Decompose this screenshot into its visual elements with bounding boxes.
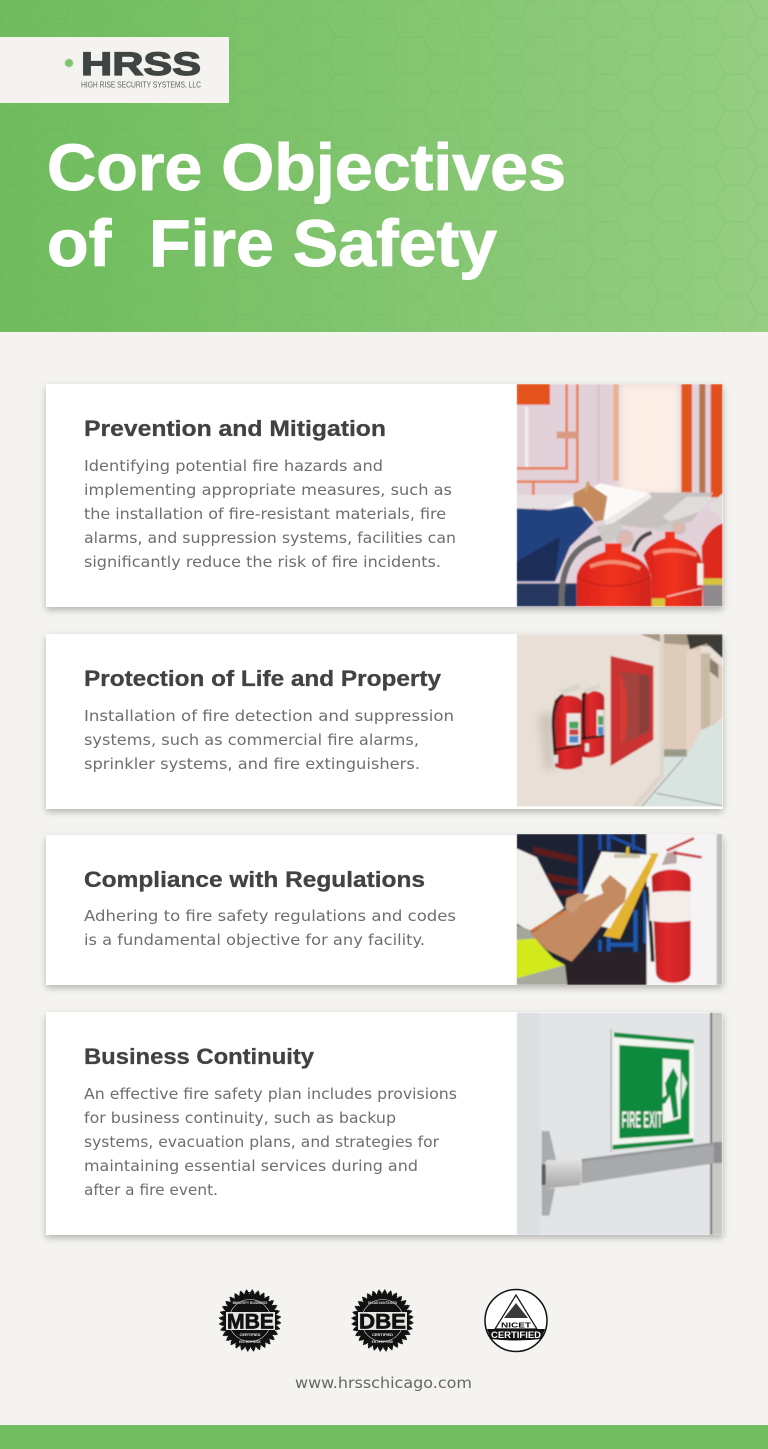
heading: prevention: Prevention and Mitigation bbox=[84, 416, 386, 441]
text block: business continuity: for business continuity, such as backup bbox=[84, 1109, 396, 1127]
text block: protection: Installation of fire detection and suppression bbox=[84, 707, 454, 725]
text block: business continuity: An effective fire safety plan includes provisions bbox=[84, 1085, 457, 1103]
badge: MBE certified: CERTIFIED bbox=[239, 1332, 261, 1337]
panel: business continuity bbox=[46, 1012, 723, 1235]
logo: HRSS bbox=[0, 37, 229, 103]
heading: compliance: Compliance with Regulations bbox=[84, 867, 425, 892]
photo: technician inspecting extinguishers bbox=[517, 384, 723, 607]
badge: DBE certified: DBE bbox=[359, 1310, 406, 1334]
text block: prevention: significantly reduce the risk of fire incidents. bbox=[84, 553, 441, 571]
text block: prevention bbox=[84, 457, 456, 571]
panel: prevention and mitigation bbox=[46, 384, 723, 607]
panel: protection of life and property bbox=[46, 634, 723, 809]
logo: HRSS: HRSS bbox=[81, 46, 201, 82]
text block: business continuity bbox=[84, 1085, 457, 1199]
text block: business continuity: maintaining essential services during and bbox=[84, 1157, 418, 1175]
text block: protection: sprinkler systems, and fire extinguishers. bbox=[84, 755, 420, 773]
title: Core Objectives bbox=[47, 130, 566, 204]
text block: prevention: the installation of fire-resistant materials, fire bbox=[84, 505, 446, 523]
photo: fire exit door and push bar: FIRE EXIT bbox=[622, 1106, 662, 1132]
badge: MBE certified: ENTERPRISE bbox=[239, 1340, 262, 1344]
photo: wall-mounted extinguishers and hose cabinet bbox=[517, 634, 723, 807]
text block: protection bbox=[84, 707, 454, 773]
badge: MBE certified: MINORITY BUSINESS bbox=[233, 1301, 268, 1305]
heading: business continuity: Business Continuity bbox=[84, 1044, 315, 1069]
text block: prevention: implementing appropriate measures, such as bbox=[84, 481, 452, 499]
badge: NICET certified bbox=[485, 1290, 547, 1352]
text block: business continuity: after a fire event. bbox=[84, 1181, 218, 1199]
text block: prevention: alarms, and suppression systems, facilities can bbox=[84, 529, 456, 547]
photo: inspector with clipboard and extinguisher bbox=[517, 834, 723, 985]
badge: NICET certified: NICET bbox=[501, 1320, 532, 1330]
badge: DBE certified bbox=[352, 1290, 413, 1351]
badge: DBE certified: DISADVANTAGED bbox=[368, 1301, 398, 1305]
title bbox=[47, 130, 566, 280]
logo: HRSS: HIGH RISE SECURITY SYSTEMS, LLC bbox=[81, 80, 201, 90]
title: of Fire Safety bbox=[47, 206, 497, 280]
badge: NICET certified: CERTIFIED bbox=[491, 1330, 542, 1340]
footer bar bbox=[0, 1425, 768, 1449]
text block: prevention: Identifying potential fire hazards and bbox=[84, 457, 383, 475]
heading: protection: Protection of Life and Property bbox=[84, 666, 442, 691]
text block: compliance: is a fundamental objective for any facility. bbox=[84, 931, 425, 949]
badge: DBE certified: ENTERPRISE bbox=[372, 1340, 394, 1344]
text block: business continuity: systems, evacuation plans, and strategies for bbox=[84, 1133, 440, 1151]
text block: compliance: Adhering to fire safety regulations and codes bbox=[84, 907, 456, 925]
badge: MBE certified: MBE bbox=[227, 1310, 274, 1334]
text block: protection: systems, such as commercial fire alarms, bbox=[84, 731, 419, 749]
text block: compliance bbox=[84, 907, 456, 949]
badge: DBE certified: CERTIFIED bbox=[372, 1332, 393, 1337]
header banner bbox=[0, 0, 768, 332]
badge: MBE certified bbox=[220, 1290, 280, 1351]
photo: fire exit door and push bar bbox=[517, 1012, 723, 1235]
panel: compliance with regulations bbox=[46, 834, 723, 985]
website url: www.hrsschicago.com bbox=[295, 1374, 472, 1392]
